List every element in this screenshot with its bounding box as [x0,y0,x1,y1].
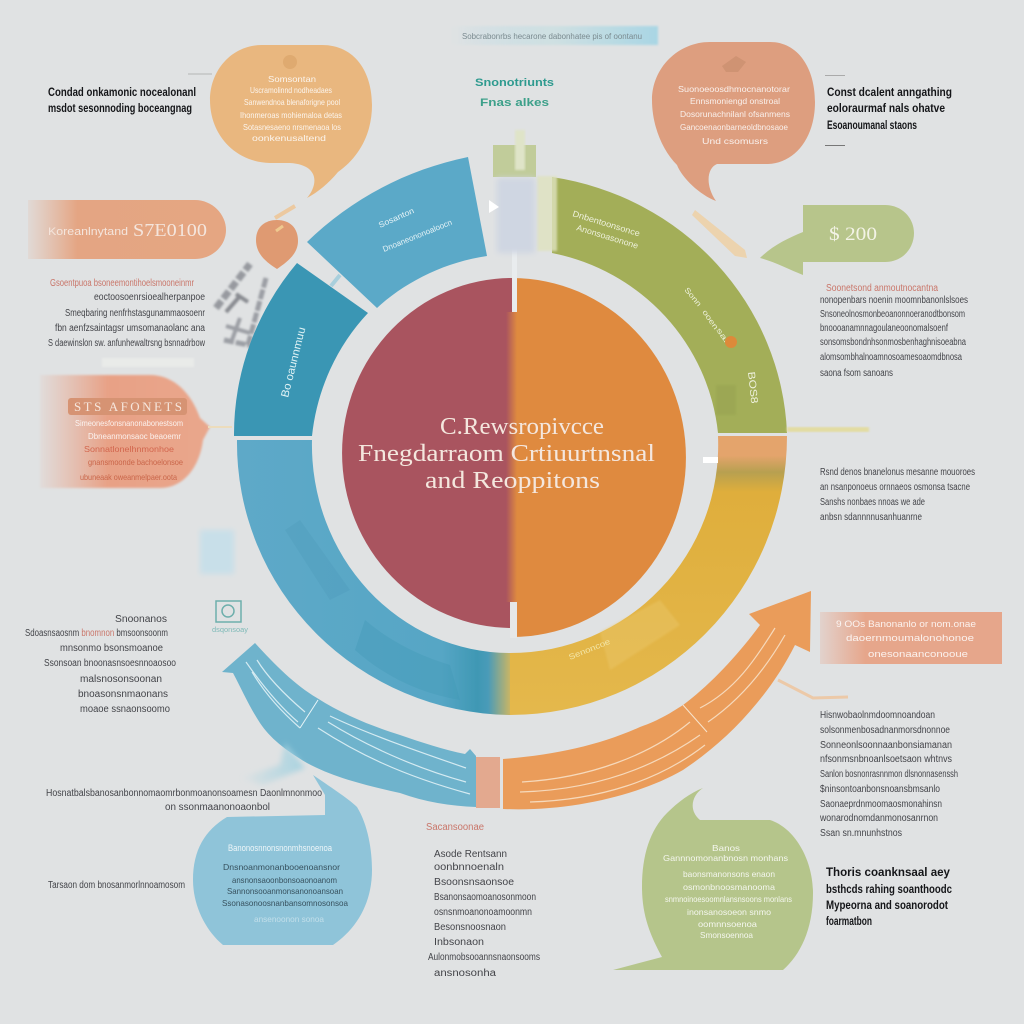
right pill: value [760,205,914,275]
speech bubble: bottom right green: osmonbnoosmanooma [683,882,775,892]
right pill: value: $ 200 [829,224,877,245]
left pill: value [28,200,226,259]
center divider [506,222,517,638]
center circle: left half [342,278,512,628]
bottom left caption: Hosnatbalsbanosanbonnomaomrbonmoanonsoamesn Daonlmnonmoo [46,788,322,799]
speech bubble: top left orange: Sanwendnoa blenaforigne pool [244,97,340,107]
speech bubble: bottom left blue: Banonosnnonsnonmhsnoenoa [228,843,332,853]
speech bubble: top right salmon [652,42,815,201]
right banner: daoernmoumalonohonoe [846,633,974,644]
speech bubble: bottom right green: Gannnomonanbnosn monhans [663,853,788,863]
right lower text block: nfsonmsnbnoanlsoetsaon whtnvs [820,754,952,765]
speech bubble: bottom left blue: Sannonsooanmonsanonoansoan [227,886,343,896]
speech bubble: top right salmon: Dosorunachnilanl ofsanmens [680,109,790,119]
speech bubble: bottom right green [613,788,813,970]
right banner: onesonaanconooue [868,649,968,660]
bottom center list: Bsoonsnsaonsoe [434,877,514,888]
right banner [820,612,1002,664]
speech bubble: bottom left blue: Ssonasonoosnanbansomnosonsoa [222,898,348,908]
top right caption [825,75,952,146]
arrow connector: lower right [778,680,848,698]
right text block: alomsombhalnoamnosoamesoaomdbnosa [820,352,962,363]
left text block: S daewinslon sw. anfunhewaltrsng bsnnadrbow [48,338,206,349]
left box: orange note: Simeonesfonsnanonabonestsom [75,418,183,428]
bottom right caption: bsthcds rahing soanthoodc [826,884,952,896]
blurred arrow accent: blue [240,743,305,785]
speech bubble: top left orange: Sotasnesaeno nrsmenaoa los [243,122,341,132]
top left caption [48,87,196,115]
speech bubble: bottom right green: oomnnsoenoa [698,919,757,929]
small connector between segments [331,275,340,286]
top right caption: Const dcalent anngathing [827,87,952,99]
icon: grey sketch [216,264,266,345]
left lower text block: bnoasonsnmaonans [78,689,168,700]
right text block: saona fsom sanoans [820,368,893,379]
ring segment: green: san [714,326,733,348]
bottom right caption: Thoris coanknsaal aey [826,867,951,879]
top center heading [475,77,554,109]
ring segment: yellow [510,436,787,715]
speech bubble: bottom left blue: ansnonsaoonbonsoaonoanom [232,875,337,885]
left pill: value: S7E0100 [133,220,207,240]
left box: orange note: ubuneaak oweanmelpaer.oota [80,472,177,482]
ring segment: yellow: Senoncoe [567,637,612,662]
speech bubble: top right salmon: Suonoeoosdhmocnanotorar [678,84,790,94]
speech bubble: top left orange: oonkenusaltend [252,133,326,143]
top right caption: eoloraurmaf nals ohatve [827,103,945,115]
top left caption: msdot sesonnoding boceangnag [48,103,192,115]
speech bubble: bottom right green: Banos [712,843,740,853]
left text block [48,278,206,367]
ring segment: green: Sonn [682,286,704,308]
right lower text block: $ninsontoanbonsnoansbmsanlo [820,784,940,795]
ring segment: upper blue [307,157,487,308]
right lower text block: Hisnwobaolnmdoomnoandoan [820,710,935,721]
right lower text block: Sanlon bosnonrasnnmon dlsnonnasenssh [820,769,958,780]
ring segment: green: BOS8 [745,371,759,405]
bottom left caption: on ssonmaanonoaonbol [165,802,270,813]
left box: orange note: gnansmoonde bachoelonsoe [88,457,183,467]
left box: orange note: STS AFONETS [74,399,182,414]
center circle: right half [512,278,686,637]
right mid text block: Sanshs nonbaes nnoas we ade [820,497,925,508]
left lower text block: mnsonmo bsonsmoanoe [60,643,163,654]
right banner: 9 OOs Banonanlo or nom.onae [836,619,976,630]
speech bubble: top left orange: Somsontan [268,74,316,84]
bottom center list: Asode Rentsann [434,849,507,860]
bottom center list: Sacansoonae [426,822,484,833]
right lower text block: Ssan sn.mnunhstnos [820,828,902,839]
ring segment: green [537,176,787,433]
bottom left side note: Tarsaon dom bnosanmorlnnoamosom [48,880,185,891]
top center heading: Snonotriunts [475,77,554,89]
ring segment: green: Anonsoasonone [575,222,640,251]
center title: Fnegdarraom Crtiuurtnsnal [358,441,655,467]
speech bubble: bottom right green: baonsmanonsons enaon [683,869,775,879]
bottom center list: ansnosonha [434,968,496,979]
left lower text block [25,614,176,715]
bottom center list: osnsnmoanonoamoonmn [434,907,532,918]
right text block: sonsomsbondnhsonmosbenhaghnisoeabna [820,337,966,348]
right text block: Snsoneolnosmonbeoanonnoeranodtbonsom [820,309,965,320]
speech bubble: bottom left blue: ansenoonon sonoa [254,914,324,924]
ring segment: teal [234,263,368,436]
speech bubble: top right salmon: Ennsmoniengd onstroal [690,96,780,106]
left pill: value: Koreanlnytand [48,226,128,238]
bottom center list: Aulonmobsooannsnaonsooms [428,952,540,963]
right lower text block: Saonaeprdnmoomaosmonahinsn [820,799,942,810]
right lower text block: solsonmenbosadnanmorsdnonnoe [820,725,950,736]
speech bubble: top right salmon: Und csomusrs [702,136,768,146]
bottom center list: oonbnnoenaln [434,862,504,873]
ring segment: upper blue: Dnoaneononoaloocn [381,218,453,254]
bottom right caption [826,867,952,928]
right lower text block: Sonneonlsoonnaanbonsiamanan [820,740,952,751]
ring segment: teal: Bo oaunnmuu [279,326,308,399]
left text block: Smeqbaring nenfrhstasgunammaosoenr [65,308,206,319]
speech bubble: bottom right green: inonsanosoeon snmo [687,907,771,917]
left lower text block: Sdoasnsaosnm bnomnon bmsoonsoonm [25,628,168,639]
top center marker [489,130,536,253]
ring segment: upper blue: Sosanton [377,206,416,230]
top right caption: Esoanoumanal staons [827,120,917,132]
left box: orange note [40,375,232,488]
right lower text block: wonarodnomdanmonosanrnon [819,813,938,824]
speech bubble: top left orange: Ihonmeroas mohiemaloa detas [240,110,342,120]
curved arrow: blue [222,643,476,807]
left text block: Gsoentpuoa bsoneemontihoelsmooneinmr [50,278,195,289]
speech bubble: bottom left blue [193,775,372,945]
top ribbon: Sobcrabonrbs hecarone dabonhatee pis of oontanu [462,32,642,41]
bottom right caption: foarmatbon [826,916,872,928]
left lower text block: malsnosonsoonan [80,674,162,685]
small connector: top [188,73,212,75]
left box: orange note: Dbneanmonsaoc beaoemr [88,431,181,441]
right mid text block [820,467,975,523]
icon: teal sketch [200,530,249,634]
ring segment: green: Dnbentoonsonce [571,208,642,238]
center title: C.Rewsropivcce [440,414,604,440]
ring segment: green: ooen [700,308,720,331]
speech bubble: bottom right green: Smonsoennoa [700,930,753,940]
icon: teal sketch: dsqonsoay [212,627,249,634]
bottom left caption [46,788,322,813]
right lower text block [819,710,958,839]
curved arrow connector block [476,757,500,808]
ring segment: lower blue [237,440,510,715]
left text block: fbn aenfzsaintagsr umsomanaolanc ana [55,323,205,334]
center title [358,414,655,494]
right mid text block: Rsnd denos bnanelonus mesanne mouoroes [820,467,975,478]
left text block: eoctoosoenrsioealherpanpoe [94,292,205,303]
left lower text block: Snoonanos [115,614,167,625]
right mid text block: an nsanponoeus ornnaeos osmonsa tsacne [820,482,970,493]
bottom center list [426,822,540,979]
arrow connector: to green pill [692,210,747,258]
right text block: Soonetsond anmoutnocantna [826,283,938,294]
left lower text block: moaoe ssnaonsoomo [80,704,170,715]
speech bubble: top left orange [210,45,372,198]
speech bubble: bottom left blue: Dnsnoanmonanbooenoansnor [223,862,340,872]
right text block [820,283,968,379]
icon: balloon [256,206,298,269]
top ribbon [450,26,658,45]
bottom center list: Inbsonaon [434,937,484,948]
bottom center list: Bsanonsaomoanosonmoon [434,892,536,903]
arrow connector: right mid [787,427,869,432]
white tick right [703,457,718,463]
bottom center list: Besonsnoosnaon [434,922,506,933]
left lower text block: Ssonsoan bnoonasnsoesnnoaosoo [44,658,176,669]
speech bubble: top right salmon: Gancoenaonbarneoldbnosaoe [680,122,788,132]
speech bubble: top left orange: Uscramolinnd nodheadaes [250,85,332,95]
speech bubble: bottom right green: snmnoinoesoomnlansnsoons monlans [665,894,792,904]
top left caption: Condad onkamonic nocealonanl [48,87,196,99]
right text block: nonopenbars noenin moomnbanonlslsoes [820,295,968,306]
center title: and Reoppitons [425,468,600,494]
top center heading: Fnas alkes [480,97,549,109]
right text block: bnoooanamnnagoulaneoonomalsoenf [820,323,948,334]
left box: orange note: Sonnatlonelhnmonhoe [84,444,174,454]
curved arrow: orange [503,591,811,809]
right mid text block: anbsn sdannnnusanhuanrne [820,512,922,523]
bottom right caption: Mypeorna and soanorodot [826,900,948,912]
